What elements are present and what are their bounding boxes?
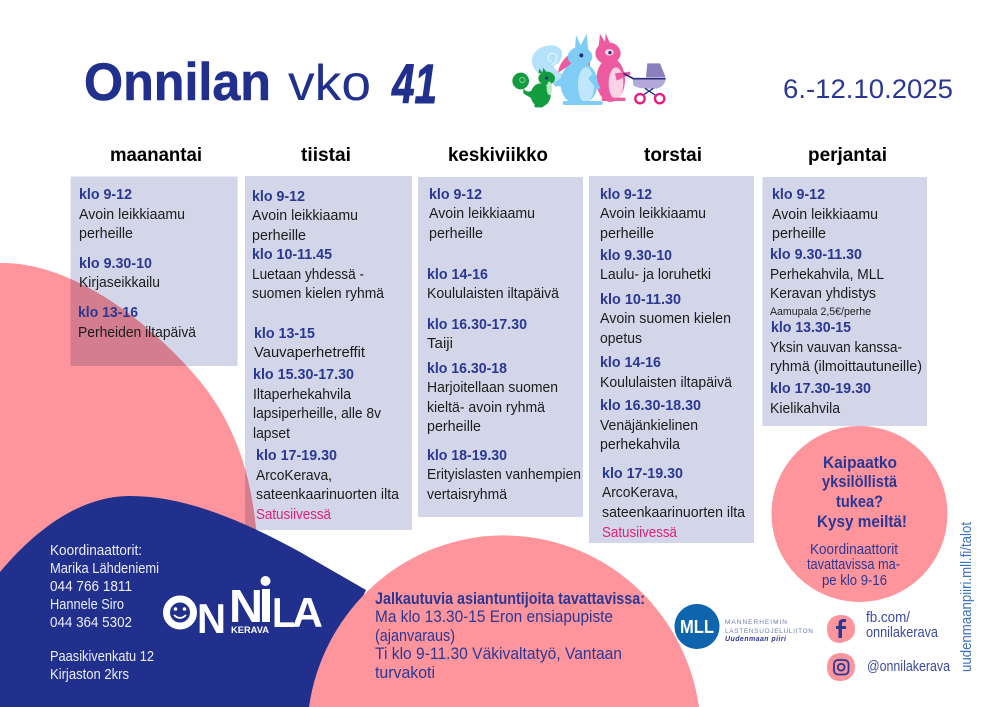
title: 41 <box>391 52 437 115</box>
panel: torstai: klo 17-19.30 <box>602 465 683 482</box>
callout circle: Koordinaattorit <box>810 542 898 558</box>
panel: torstai <box>589 145 754 543</box>
facebook handle: onnilakerava <box>866 624 939 641</box>
panel: perjantai: Perhekahvila, MLL <box>770 266 884 283</box>
panel: keskiviikko: klo 9-12 <box>429 186 482 203</box>
contact text: Paasikivenkatu 12 <box>50 649 154 665</box>
facebook handle: fb.com/ <box>866 609 911 626</box>
panel: torstai: klo 10-11.30 <box>600 291 681 308</box>
panel: tiistai: klo 13-15 <box>254 325 315 342</box>
panel: keskiviikko: Avoin leikkiaamu <box>429 205 535 222</box>
panel: tiistai: klo 17-19.30 <box>256 447 337 464</box>
panel: perjantai: Aamupala 2,5€/perhe <box>770 306 871 318</box>
panel: maanantai: Kirjaseikkailu <box>79 274 160 291</box>
panel: keskiviikko: Taiji <box>427 335 453 352</box>
callout circle: pe klo 9-16 <box>822 573 887 589</box>
panel: experts: (ajanvaraus) <box>375 626 455 645</box>
logo: Onnila Kerava: KERAVA <box>231 625 269 636</box>
panel: torstai: ArcoKerava, <box>602 484 678 501</box>
panel: maanantai: Avoin leikkiaamu <box>79 206 185 223</box>
title <box>84 52 437 115</box>
contact text: 044 766 1811 <box>50 579 132 595</box>
panel: torstai: klo 9.30-10 <box>600 247 672 264</box>
panel: keskiviikko: kieltä- avoin ryhmä <box>427 399 546 416</box>
logo: Onnila Kerava: N <box>229 580 263 632</box>
panel: keskiviikko: Koululaisten iltapäivä <box>427 285 560 302</box>
icon: instagram <box>827 653 855 681</box>
logo: Onnila Kerava <box>166 576 323 642</box>
panel: keskiviikko <box>418 145 583 517</box>
panel: perjantai <box>762 145 927 426</box>
panel: maanantai: Perheiden iltapäivä <box>78 324 197 341</box>
panel: maanantai: klo 9-12 <box>79 186 132 203</box>
instagram handle: @onnilakerava <box>867 658 951 675</box>
heading: torstai: torstai <box>644 145 702 166</box>
panel: torstai: sateenkaarinuorten ilta <box>602 504 746 521</box>
callout circle <box>772 426 948 602</box>
logo: MLL: MANNERHEIMIN <box>725 619 787 626</box>
panel: perjantai: Keravan yhdistys <box>770 285 876 302</box>
panel: tiistai: Luetaan yhdessä - <box>252 266 364 283</box>
logo: MLL: Uudenmaan piiri <box>725 636 787 643</box>
panel: maanantai: perheille <box>79 225 133 242</box>
panel: torstai: perheille <box>600 225 654 242</box>
heading: keskiviikko: keskiviikko <box>448 145 548 166</box>
panel: experts: Ti klo 9-11.30 Väkivaltatyö, Vantaan <box>375 644 622 663</box>
facebook handle <box>866 609 939 641</box>
panel: tiistai: klo 15.30-17.30 <box>253 366 354 383</box>
contact text: Marika Lähdeniemi <box>50 561 159 577</box>
contact text: 044 364 5302 <box>50 615 132 631</box>
panel: tiistai: sateenkaarinuorten ilta <box>256 486 400 503</box>
panel: tiistai: ArcoKerava, <box>256 467 332 484</box>
callout circle: Kaipaatko <box>823 453 897 472</box>
heading: perjantai: perjantai <box>808 145 887 166</box>
panel: tiistai: perheille <box>252 227 306 244</box>
panel: tiistai: Iltaperhekahvila <box>253 386 352 403</box>
vertical website url: uudenmaanpiiri.mll.fi/talot <box>958 521 975 672</box>
panel: perjantai: Kielikahvila <box>770 400 841 417</box>
panel: experts: turvakoti <box>375 663 435 682</box>
date: 6.-12.10.2025 <box>783 74 953 104</box>
panel: tiistai: lapset <box>253 425 291 442</box>
heading: tiistai: tiistai <box>301 145 351 166</box>
panel: maanantai: klo 13-16 <box>78 304 138 321</box>
panel: perjantai: perheille <box>772 225 826 242</box>
logo: Onnila Kerava: A <box>292 589 323 636</box>
panel: keskiviikko: Harjoitellaan suomen <box>427 379 558 396</box>
panel: keskiviikko: Erityislasten vanhempien <box>427 466 581 483</box>
contact text: Koordinaattorit: <box>50 543 142 559</box>
icon: facebook <box>827 615 855 643</box>
title: Onnilan <box>84 53 271 112</box>
panel: tiistai <box>245 145 412 530</box>
panel: tiistai: klo 9-12 <box>252 188 305 205</box>
logo: Onnila Kerava: N <box>197 595 226 642</box>
background pink blob left <box>0 263 257 600</box>
panel: torstai: opetus <box>600 330 642 347</box>
panel: torstai: klo 14-16 <box>600 354 661 371</box>
panel: perjantai: klo 13.30-15 <box>771 319 851 336</box>
panel: experts: Jalkautuvia asiantuntijoita tavattavissa: <box>375 589 645 608</box>
callout circle: tavattavissa ma- <box>807 557 900 573</box>
title: vko <box>288 55 371 111</box>
panel: tiistai: suomen kielen ryhmä <box>252 285 385 302</box>
panel: torstai: klo 16.30-18.30 <box>600 397 701 414</box>
callout circle: Kysy meiltä! <box>817 512 907 531</box>
illustration: squirrels with stroller <box>512 33 666 107</box>
panel: torstai: Venäjänkielinen <box>600 417 698 434</box>
panel: tiistai: klo 10-11.45 <box>252 246 332 263</box>
panel: perjantai: klo 9-12 <box>772 186 825 203</box>
panel: keskiviikko: klo 14-16 <box>427 266 488 283</box>
panel: torstai: Avoin suomen kielen <box>600 310 731 327</box>
panel: tiistai: lapsiperheille, alle 8v <box>253 405 381 422</box>
panel: keskiviikko: klo 16.30-17.30 <box>427 316 527 333</box>
panel: experts: Ma klo 13.30-15 Eron ensiapupiste <box>375 607 613 626</box>
panel: contact blob <box>0 496 366 707</box>
heading: maanantai: maanantai <box>110 145 202 166</box>
logo: Onnila Kerava: L <box>272 589 295 636</box>
panel: tiistai: Avoin leikkiaamu <box>252 207 358 224</box>
panel: keskiviikko: klo 16.30-18 <box>427 360 507 377</box>
panel: perjantai: ryhmä (ilmoittautuneille) <box>770 358 922 375</box>
panel: torstai: perhekahvila <box>600 436 681 453</box>
panel: keskiviikko: perheille <box>429 225 483 242</box>
panel: torstai: Koululaisten iltapäivä <box>600 374 733 391</box>
panel: tiistai: Vauvaperhetreffit <box>254 344 366 361</box>
panel: perjantai: Yksin vauvan kanssa- <box>770 339 902 356</box>
callout circle: tukea? <box>836 492 883 511</box>
panel: keskiviikko: klo 18-19.30 <box>427 447 507 464</box>
panel: perjantai: klo 17.30-19.30 <box>770 380 871 397</box>
panel: maanantai <box>70 145 238 366</box>
panel: keskiviikko: vertaisryhmä <box>427 486 508 503</box>
contact text <box>50 543 159 683</box>
logo: MLL: LASTENSUOJELULIITON <box>725 628 813 635</box>
logo: MLL <box>674 604 813 649</box>
panel: perjantai: Avoin leikkiaamu <box>772 206 878 223</box>
contact text: Hannele Siro <box>50 597 124 613</box>
panel: experts <box>309 535 699 707</box>
panel: torstai: Satusiivessä <box>602 524 678 541</box>
panel: torstai: Laulu- ja loruhetki <box>600 266 711 283</box>
panel: tiistai: Satusiivessä <box>256 506 332 523</box>
callout circle: yksilöllistä <box>822 472 897 491</box>
panel: perjantai: klo 9.30-11.30 <box>770 246 862 263</box>
contact text: Kirjaston 2krs <box>50 667 129 683</box>
logo: MLL: MLL <box>680 617 714 637</box>
panel: torstai: Avoin leikkiaamu <box>600 205 706 222</box>
panel: maanantai: klo 9.30-10 <box>79 255 152 272</box>
panel: keskiviikko: perheille <box>427 418 481 435</box>
panel: torstai: klo 9-12 <box>600 186 652 203</box>
